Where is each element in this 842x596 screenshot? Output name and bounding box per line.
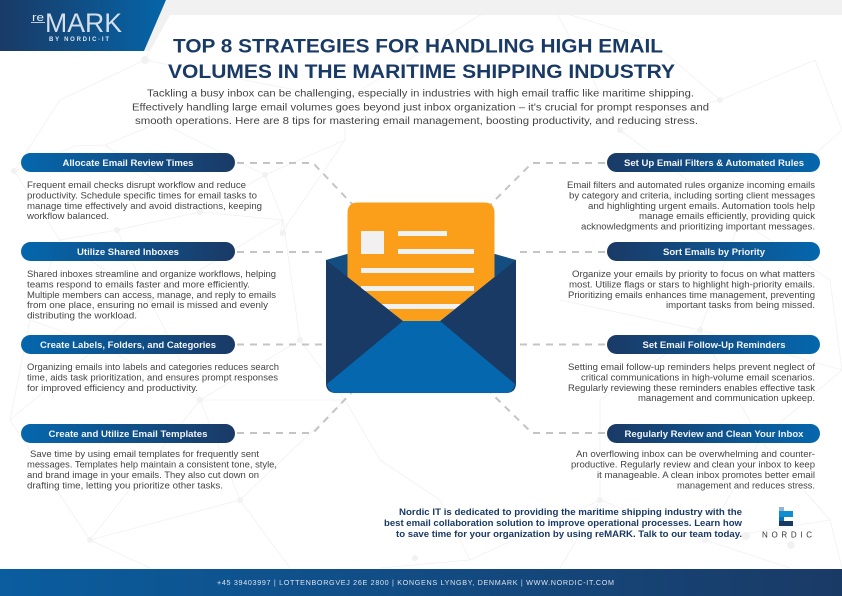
panel: Create and Utilize Email Templates: drafting time, letting you prioritize other tasks. xyxy=(27,480,223,490)
panel: Set Email Follow-Up Reminders: Regularly reviewing these reminders enables effective task xyxy=(568,383,816,393)
header logo banner xyxy=(0,0,166,51)
panel: Create and Utilize Email Templates: messages. Templates help maintain a consistent tone, style, xyxy=(27,460,277,470)
title: VOLUMES IN THE MARITIME SHIPPING INDUSTRY xyxy=(168,61,675,83)
title: TOP 8 STRATEGIES FOR HANDLING HIGH EMAIL xyxy=(173,36,663,58)
panel: Create Labels, Folders, and Categories: Organizing emails into labels and categories reduces search xyxy=(27,362,279,372)
intro text: Tackling a busy inbox can be challenging, especially in industries with high email traffic like maritime shipping. xyxy=(147,88,694,100)
panel: Set Up Email Filters & Automated Rules: by category and criteria, including sorting client messages xyxy=(569,190,816,200)
panel: Regularly Review and Clean Your Inbox: An overflowing inbox can be overwhelming and counter- xyxy=(576,449,815,459)
panel: Set Email Follow-Up Reminders: critical communications in high-volume email scenarios. xyxy=(581,372,815,382)
closing statement: to save time for your organization by using reMARK. Talk to our team today. xyxy=(396,528,742,539)
logo: reMARK by Nordic IT: BY NORDIC·IT xyxy=(49,37,109,43)
panel: Regularly Review and Clean Your Inbox: management and reduces stress. xyxy=(677,480,815,490)
panel: Set Up Email Filters & Automated Rules: Set Up Email Filters & Automated Rules xyxy=(624,158,804,168)
panel: Utilize Shared Inboxes: Shared inboxes streamline and organize workflows, helping xyxy=(27,269,276,279)
panel: Allocate Email Review Times: productivity. Schedule specific times for email tasks to xyxy=(27,190,257,200)
intro text xyxy=(132,88,709,127)
connector lines xyxy=(237,163,605,433)
title xyxy=(168,36,675,83)
panel: Create Labels, Folders, and Categories: time, aids task prioritization, and ensures prompt responses xyxy=(27,372,279,382)
logo: Nordic xyxy=(762,507,812,540)
panel: Sort Emails by Priority xyxy=(568,242,820,310)
panel: Create and Utilize Email Templates: Save time by using email templates for frequently sent xyxy=(30,449,260,459)
panel: Set Up Email Filters & Automated Rules xyxy=(567,153,820,232)
panel: Set Email Follow-Up Reminders xyxy=(568,335,820,403)
panel: Utilize Shared Inboxes: distributing the workload. xyxy=(27,310,137,320)
panel: Create Labels, Folders, and Categories xyxy=(21,335,279,393)
logo: reMARK by Nordic IT: MARK xyxy=(45,8,122,38)
panel: Create and Utilize Email Templates: Create and Utilize Email Templates xyxy=(48,429,208,439)
panel: Sort Emails by Priority: Sort Emails by Priority xyxy=(663,247,766,257)
panel: Utilize Shared Inboxes: Multiple members can access, manage, and reply to emails xyxy=(27,290,277,300)
panel: Utilize Shared Inboxes: Utilize Shared Inboxes xyxy=(77,247,179,257)
panel: Set Up Email Filters & Automated Rules: and highlighting urgent emails. Automation tools help xyxy=(588,201,815,211)
panel: Regularly Review and Clean Your Inbox: Regularly Review and Clean Your Inbox xyxy=(624,429,804,439)
panel: Create and Utilize Email Templates xyxy=(21,424,277,490)
panel: Create and Utilize Email Templates: and brand image in your emails. They also cut down on xyxy=(27,470,259,480)
panel: Set Email Follow-Up Reminders: Setting email follow-up reminders helps prevent neglect of xyxy=(568,362,816,372)
panel: Regularly Review and Clean Your Inbox xyxy=(571,424,820,490)
panel: Sort Emails by Priority: important tasks from being missed. xyxy=(666,300,815,310)
panel: Allocate Email Review Times: Allocate Email Review Times xyxy=(62,158,194,168)
closing statement xyxy=(384,506,743,539)
panel: Sort Emails by Priority: Prioritizing emails enhances time management, preventing xyxy=(568,290,815,300)
panel: Allocate Email Review Times: workflow balanced. xyxy=(26,211,109,221)
footer bar: +45 39403997 | LOTTENBORGVEJ 26E 2800 | KONGENS LYNGBY, DENMARK | WWW.NORDIC-IT.COM xyxy=(217,578,614,587)
panel: Regularly Review and Clean Your Inbox: it manageable. A clean inbox promotes better email xyxy=(597,470,815,480)
letter xyxy=(348,202,494,321)
panel: Allocate Email Review Times: manage time effectively and avoid distractions, keeping xyxy=(27,201,262,211)
panel: Regularly Review and Clean Your Inbox: productive. Regularly review and clean your inbox to keep xyxy=(571,460,815,470)
top grey strip xyxy=(144,0,842,51)
footer bar xyxy=(0,569,842,596)
panel: Set Up Email Filters & Automated Rules: acknowledgments and prioritizing important messages. xyxy=(581,222,815,232)
closing statement: best email collaboration solution to improve operational processes. Learn how xyxy=(384,517,743,528)
panel: Allocate Email Review Times: Frequent email checks disrupt workflow and reduce xyxy=(27,180,246,190)
panel: Create Labels, Folders, and Categories: for improved efficiency and productivity. xyxy=(27,383,198,393)
intro text: Effectively handling large email volumes goes beyond just inbox organization – it's crucial for prompt responses and xyxy=(132,102,709,114)
closing statement: Nordic IT is dedicated to providing the maritime shipping industry with the xyxy=(399,506,742,517)
panel: Utilize Shared Inboxes xyxy=(21,242,277,320)
panel: Sort Emails by Priority: most. Utilize flags or stars to highlight high-priority emails. xyxy=(569,280,815,290)
logo: reMARK by Nordic IT: re xyxy=(32,12,44,24)
logo: Nordic: NORDIC xyxy=(762,530,812,540)
panel: Utilize Shared Inboxes: teams respond to emails faster and more efficiently. xyxy=(27,280,250,290)
panel: Set Email Follow-Up Reminders: Set Email Follow-Up Reminders xyxy=(642,340,786,350)
icon: open envelope with letter xyxy=(326,202,516,393)
panel: Utilize Shared Inboxes: from one place, ensuring no email is missed and evenly xyxy=(27,300,269,310)
panel: Create Labels, Folders, and Categories: Create Labels, Folders, and Categories xyxy=(40,340,216,350)
panel: Set Up Email Filters & Automated Rules: manage emails efficiently, providing quick xyxy=(639,211,816,221)
panel: Set Up Email Filters & Automated Rules: Email filters and automated rules organize incoming emails xyxy=(567,180,816,190)
panel: Allocate Email Review Times xyxy=(21,153,262,221)
intro text: smooth operations. Here are 8 tips for mastering email management, boosting productivity, and reducing stress. xyxy=(135,116,698,127)
panel: Sort Emails by Priority: Organize your emails by priority to focus on what matters xyxy=(572,269,816,279)
panel: Set Email Follow-Up Reminders: management and communication upkeep. xyxy=(638,393,815,403)
